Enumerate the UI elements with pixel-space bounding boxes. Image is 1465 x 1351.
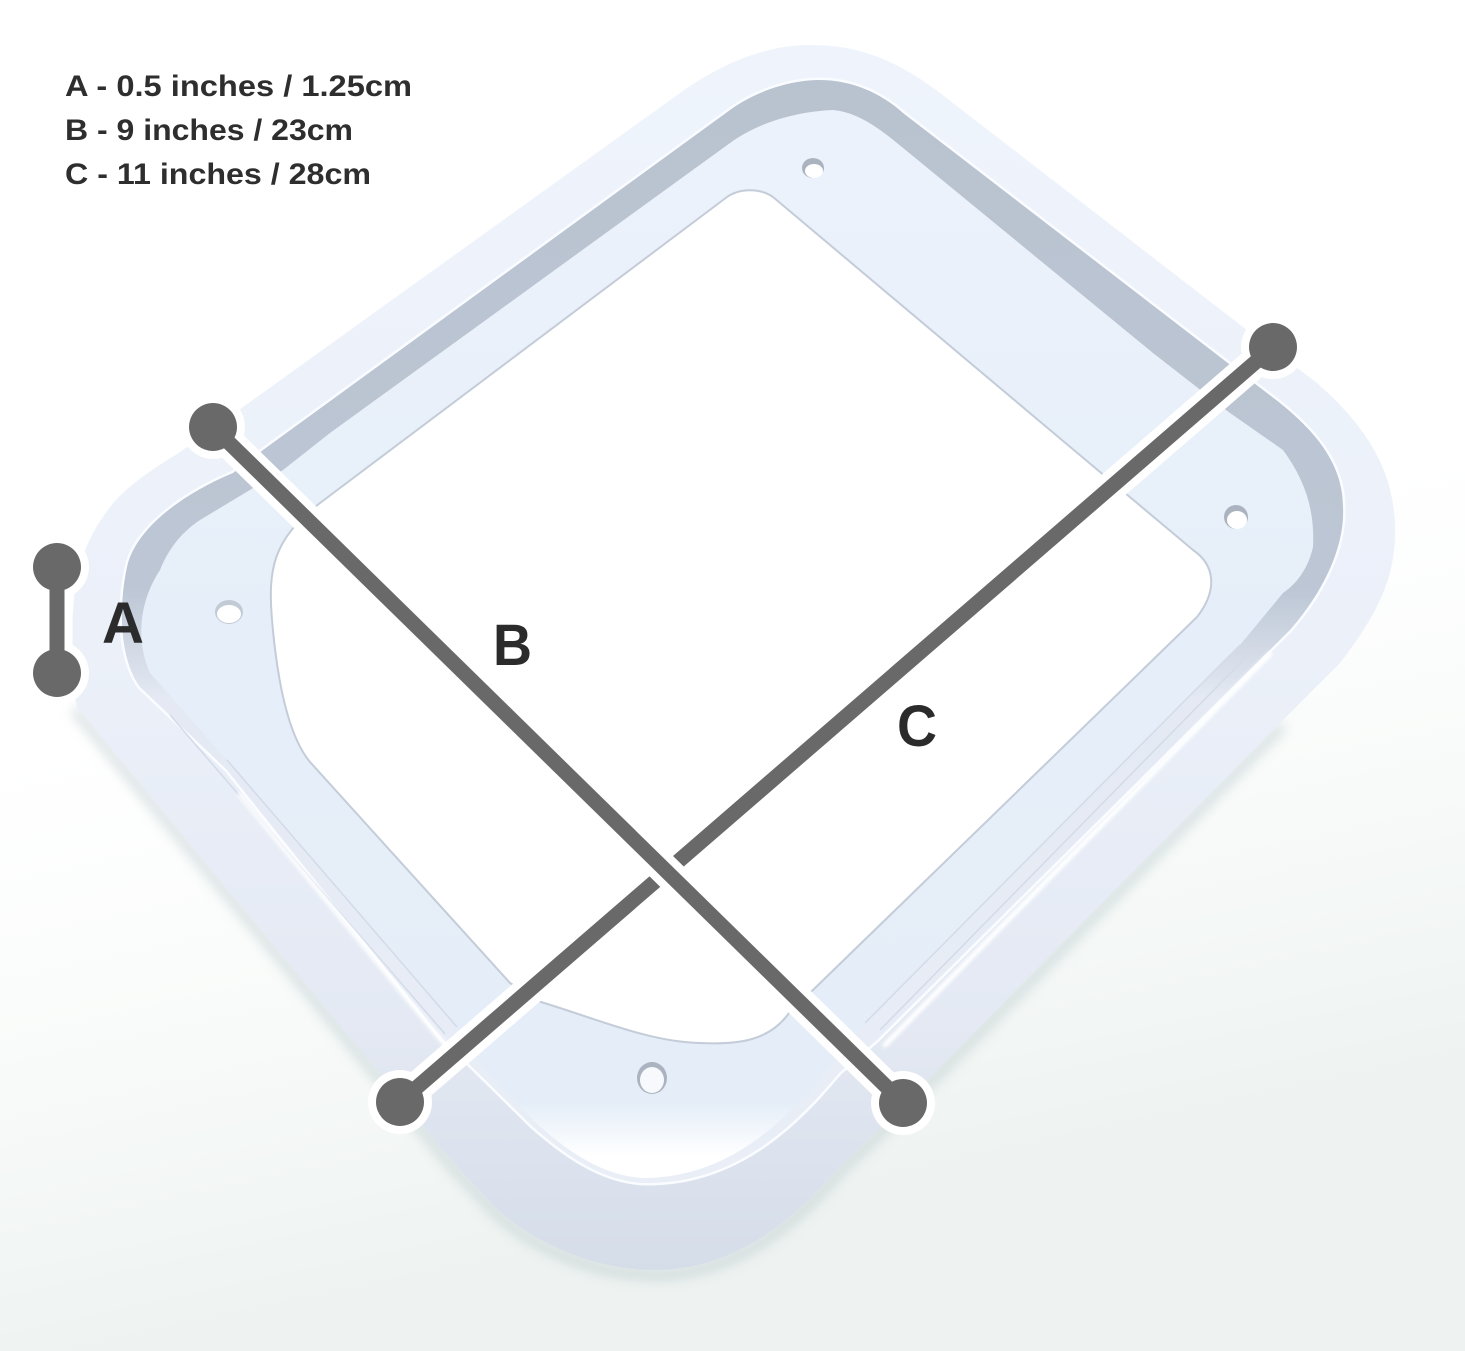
mounting hole: top (802, 158, 824, 178)
recess floor (141, 110, 1313, 1178)
measurements legend (65, 70, 412, 191)
mounting hole: right (1224, 505, 1248, 529)
label A: A (102, 591, 144, 656)
mounting hole: bottom (637, 1062, 667, 1094)
label B: B (493, 613, 532, 678)
label C: C (897, 694, 937, 759)
measurements legend: C - 11 inches / 28cm (65, 158, 371, 191)
raised lip highlight (122, 80, 1343, 1183)
tray shadow (77, 712, 1280, 1275)
window opening (271, 190, 1211, 1043)
dimension A marker (25, 535, 89, 705)
measurements legend: B - 9 inches / 23cm (65, 114, 353, 147)
mounting hole: left (215, 600, 243, 624)
recess wall (122, 80, 1343, 1183)
dimension C marker (368, 315, 1305, 1134)
measurements legend: A - 0.5 inches / 1.25cm (65, 70, 412, 103)
dimension B marker (181, 395, 935, 1135)
ridge lines and gloss on lower sides (170, 645, 1270, 1045)
